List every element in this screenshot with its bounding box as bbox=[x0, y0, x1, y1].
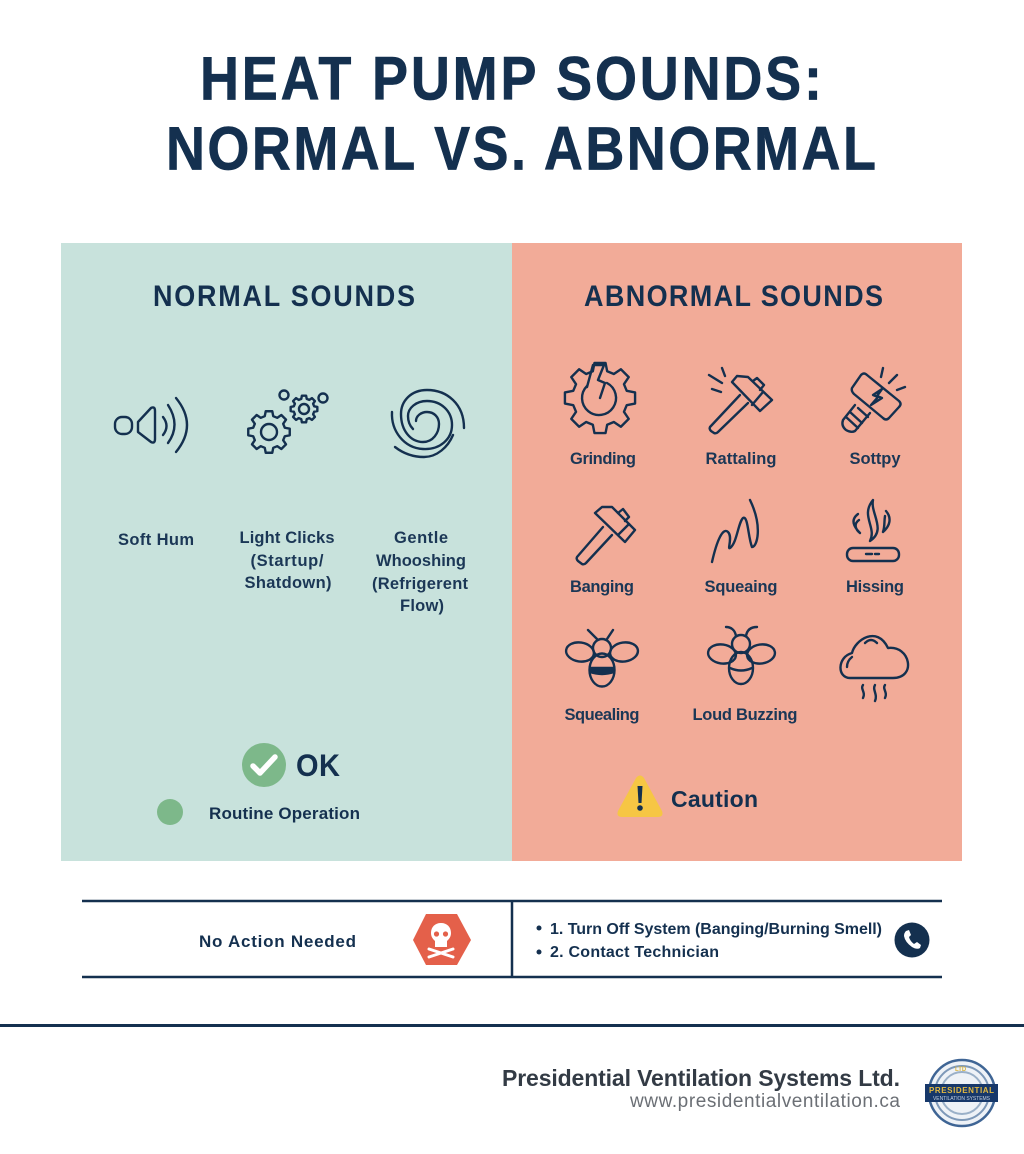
label: squeaing: Squeaing bbox=[704, 578, 778, 596]
icon: gears light clicks bbox=[248, 390, 328, 453]
icon: cracked gear grinding bbox=[565, 363, 635, 433]
label: grinding: Grinding bbox=[570, 450, 636, 468]
footer: logo badge: LTD bbox=[955, 1067, 967, 1073]
label: light clicks: Light Clicks bbox=[240, 529, 334, 547]
label: sottpy: Sottpy bbox=[850, 450, 901, 468]
action list bbox=[536, 921, 882, 961]
icon: skull hexagon bbox=[413, 914, 471, 965]
label: light clicks bbox=[240, 529, 334, 592]
label: gentle whooshing bbox=[372, 529, 468, 615]
footer: logo badge: PRESIDENTIAL bbox=[929, 1086, 994, 1095]
title: NORMAL VS. ABNORMAL bbox=[166, 115, 876, 183]
label: no action needed: No Action Needed bbox=[199, 932, 356, 951]
footer: website: www.presidentialventilation.ca bbox=[629, 1091, 900, 1112]
panel: normal sounds bbox=[61, 243, 512, 861]
label: light clicks: (Startup/ bbox=[250, 552, 324, 570]
status: ok: OK bbox=[296, 748, 340, 783]
label: hissing: Hissing bbox=[846, 578, 904, 596]
footer: logo badge bbox=[925, 1060, 998, 1126]
icon: hammer rattling bbox=[709, 368, 772, 433]
label: gentle whooshing: Whooshing bbox=[376, 552, 466, 570]
action bar bbox=[82, 901, 942, 977]
label: gentle whooshing: Flow) bbox=[400, 597, 444, 615]
footer: company name: Presidential Ventilation Systems Ltd. bbox=[502, 1065, 900, 1091]
label: gentle whooshing: (Refrigerent bbox=[372, 575, 468, 593]
icon: steam hissing bbox=[847, 500, 899, 561]
label: soft hum: Soft Hum bbox=[118, 531, 194, 549]
icon: cloud with steam bbox=[840, 636, 908, 701]
icon: bee loud buzzing bbox=[707, 627, 776, 684]
label: rattaling: Rattaling bbox=[706, 450, 776, 468]
icon: bee squealing bbox=[565, 630, 639, 686]
icon: caution triangle bbox=[618, 776, 662, 817]
label: banging: Banging bbox=[570, 578, 634, 596]
status dot bbox=[157, 799, 183, 825]
heading: normal sounds: NORMAL SOUNDS bbox=[153, 280, 415, 313]
label: loud buzzing: Loud Buzzing bbox=[692, 706, 798, 724]
label: squealing: Squealing bbox=[564, 706, 640, 724]
status: ok bbox=[242, 743, 340, 787]
title: HEAT PUMP SOUNDS: bbox=[200, 45, 822, 113]
label: light clicks: Shatdown) bbox=[244, 574, 332, 592]
icon: bolt sottpy bbox=[842, 368, 905, 432]
label: routine operation: Routine Operation bbox=[209, 804, 360, 823]
action list: 2. Contact Technician bbox=[550, 944, 719, 961]
footer: logo badge: VENTILATION SYSTEMS bbox=[933, 1096, 991, 1102]
icon: phone bbox=[894, 922, 930, 958]
label: caution: Caution bbox=[671, 786, 758, 812]
heading: abnormal sounds: ABNORMAL SOUNDS bbox=[584, 280, 883, 313]
footer rule bbox=[0, 1024, 1024, 1027]
icon: squiggle squeaing bbox=[712, 500, 758, 562]
action list: 1. Turn Off System (Banging/Burning Smell) bbox=[550, 921, 882, 938]
label: gentle whooshing: Gentle bbox=[394, 529, 448, 547]
icon: swirl gentle whooshing bbox=[392, 390, 464, 457]
icon: speaker soft hum bbox=[115, 398, 187, 452]
title bbox=[166, 45, 876, 183]
panel: abnormal sounds bbox=[512, 243, 962, 861]
icon: hammer banging bbox=[577, 507, 635, 564]
